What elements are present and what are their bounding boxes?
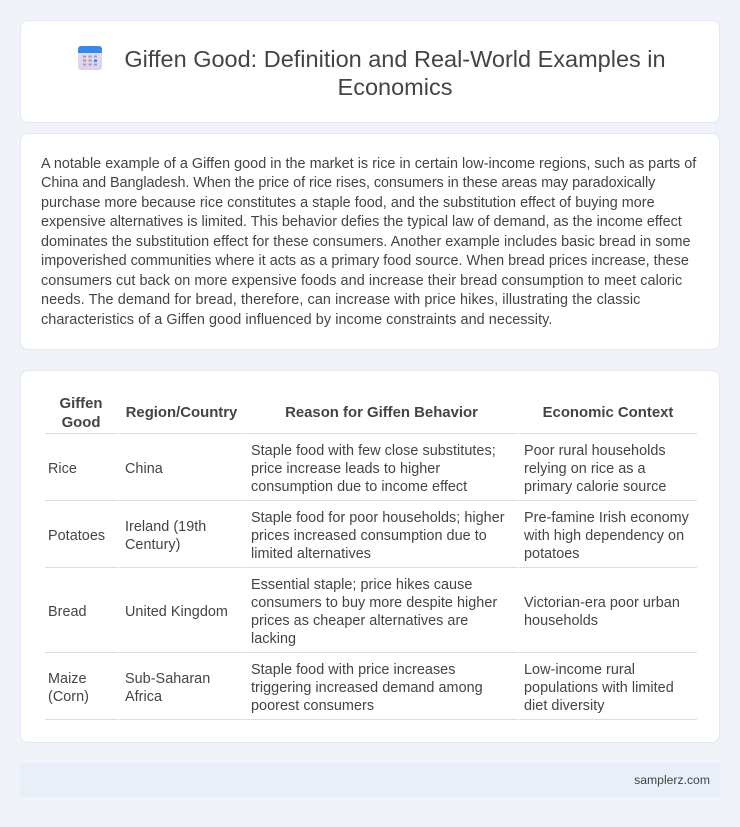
row: potatoes: Ireland (19th [125,519,206,535]
row: rice: consumption due to income effect [251,479,467,495]
panel: description text: impoverished communities where it acts as a primary food source. When bread prices increase, these [41,253,689,269]
row: rice: primary calorie source [524,479,666,495]
table header: Giffen [59,396,102,412]
table header: Good [62,415,100,431]
panel: table of Giffen goods [20,370,720,743]
row: bread: prices as cheaper alternatives are [251,613,468,629]
title: Economics [338,74,452,100]
row: bread: lacking [251,631,296,647]
panel: description text: needs. The demand for bread, therefore, can increase with price hikes, illustrating the classic [41,292,640,308]
table header: Reason for Giffen Behavior [285,405,478,421]
panel: description text: expensive alternatives is limited. This behavior defies the typical law of demand, as the income effect [41,214,682,230]
table header: Economic Context [543,405,673,421]
row: rice: China [125,461,163,477]
row: maize: Low-income rural [524,662,635,678]
row: bread: Victorian-era poor urban [524,595,680,611]
row: rice: relying on rice as a [524,461,646,477]
row: potatoes [48,510,689,562]
row: rice: Poor rural households [524,443,666,459]
row: rice: price increase leads to higher [251,461,440,477]
row: maize: (Corn) [48,689,89,705]
row: bread: consumers to buy more despite higher [251,595,497,611]
row: maize: Maize [48,671,87,687]
row: rice: Rice [48,461,77,477]
icon: calendar [78,46,102,70]
row: potatoes: limited alternatives [251,546,371,562]
row: rice [48,443,666,495]
table header [59,396,674,431]
row: bread [48,577,680,647]
row: potatoes: Potatoes [48,528,105,544]
panel: description text: purchase more because rice constitutes a staple food, and the substitution effect of buying more [41,195,655,211]
panel: description text: consumers cut back on more expensive foods and increase their bread consumption to meet caloric [41,273,682,289]
row: maize: diet diversity [524,698,605,714]
title: Giffen Good: Definition and Real-World Examples in [124,46,666,72]
row: potatoes: Pre-famine Irish economy [524,510,689,526]
row: potatoes: Century) [125,537,181,553]
row: potatoes: Staple food for poor households; higher [251,510,505,526]
footer credit: samplerz.com [634,773,710,787]
panel: description text [20,133,720,350]
row: potatoes: potatoes [524,546,580,562]
panel: description text: A notable example of a Giffen good in the market is rice in certain low-income regions, such as parts of [41,156,696,172]
row: potatoes: with high dependency on [524,528,684,544]
row: maize: Sub-Saharan [125,671,210,687]
panel: description text: dominates the substitution effect for these consumers. Another example includes basic bread in some [41,234,691,250]
row: potatoes: prices increased consumption due to [251,528,487,544]
row: bread: Essential staple; price hikes cause [251,577,472,593]
row: maize: Staple food with price increases [251,662,455,678]
row: maize [48,662,674,714]
row: bread: households [524,613,598,629]
panel: title header [20,20,720,123]
table header: Region/Country [126,405,237,421]
title [124,46,666,100]
row: maize: Africa [125,689,162,705]
panel: description text: characteristics of a Giffen good influenced by income constraints and necessity. [41,312,552,328]
row: maize: poorest consumers [251,698,374,714]
row: rice: Staple food with few close substitutes; [251,443,496,459]
row: bread: United Kingdom [125,604,228,620]
row: bread: Bread [48,604,87,620]
panel: description text: China and Bangladesh. When the price of rice rises, consumers in these areas may paradoxically [41,175,655,191]
row: maize: populations with limited [524,680,674,696]
row: maize: triggering increased demand among [251,680,483,696]
footer bar [20,763,720,797]
